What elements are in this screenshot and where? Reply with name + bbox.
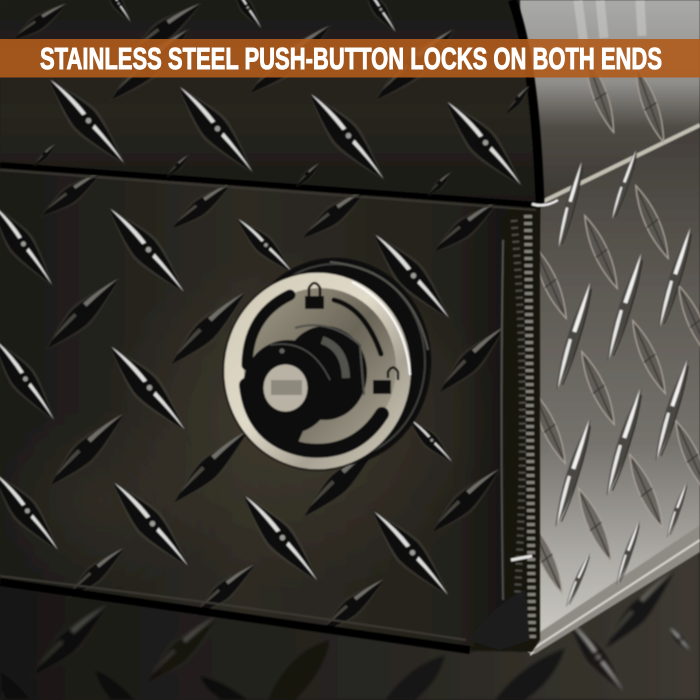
body treads bright [0,195,462,607]
lock black backing [239,258,431,466]
lock assembly [224,258,431,470]
chrome ring [224,272,412,470]
lid treads dark [8,0,534,199]
panel: front body [0,163,540,652]
body treads dark [35,163,514,641]
panel: right side face [520,0,700,656]
panel: floor surface [0,550,700,700]
ring slots [247,295,290,365]
key face [264,364,308,412]
icon: unlocked padlock [373,368,398,394]
banner [0,39,700,78]
panel: lid [0,0,558,210]
right face treads [523,55,700,608]
push button cylinder [243,325,367,434]
lid treads bright [37,0,534,197]
panel: seam weld [468,205,540,652]
icon: locked padlock [305,283,324,309]
